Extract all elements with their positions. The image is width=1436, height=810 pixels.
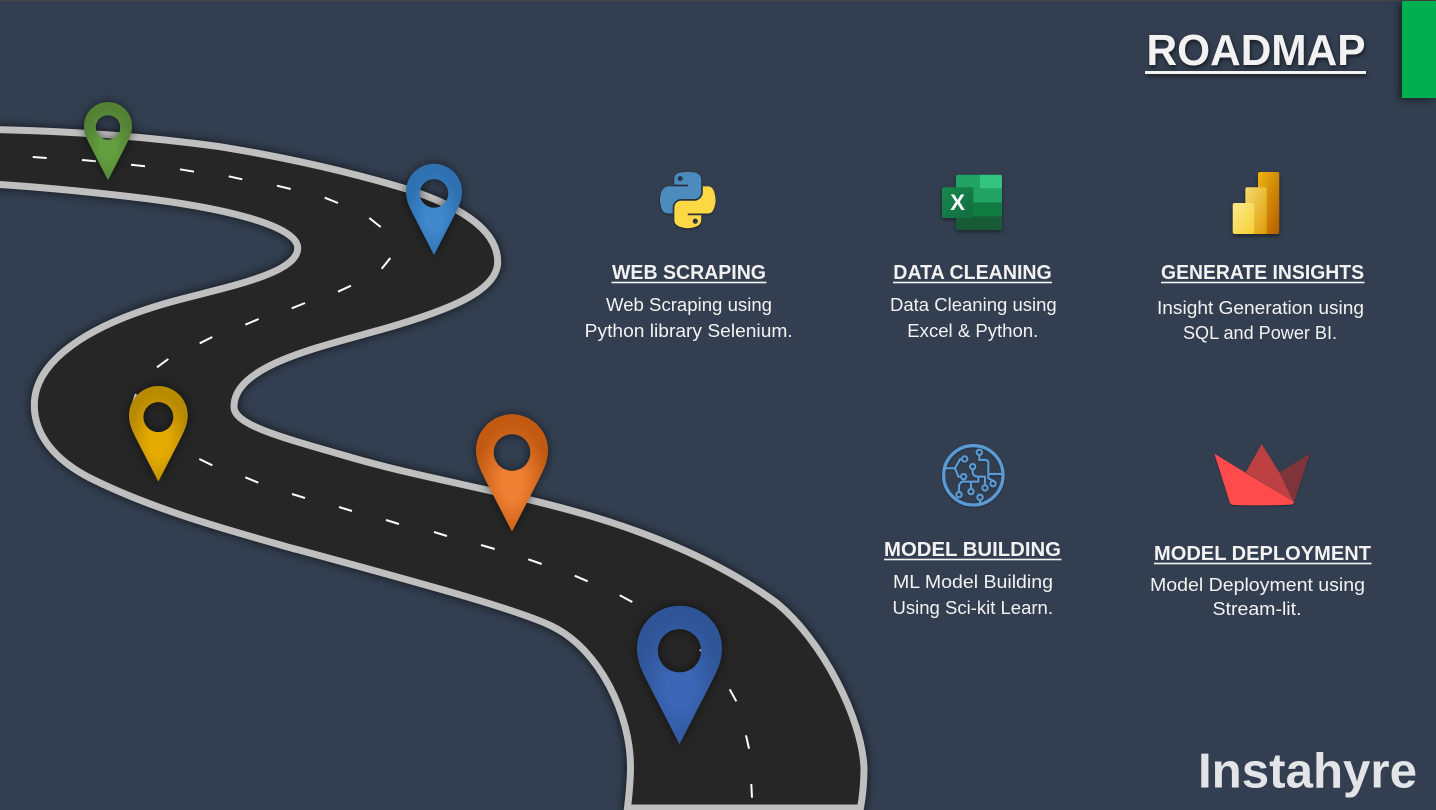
lane dashes xyxy=(33,157,752,798)
description: web scraping: Python library Selenium. xyxy=(585,321,793,341)
heading: model building: MODEL BUILDING xyxy=(884,538,1061,561)
pin: light blue xyxy=(406,164,462,255)
description: web scraping: Web Scraping using xyxy=(606,295,772,315)
description: web scraping xyxy=(585,295,793,341)
pin: yellow xyxy=(129,386,188,482)
heading: generate insights: GENERATE INSIGHTS xyxy=(1161,261,1364,284)
panel: web scraping xyxy=(585,172,793,341)
heading: web scraping: WEB SCRAPING xyxy=(612,261,766,284)
panel: data cleaning xyxy=(890,175,1057,341)
icon: circuit brain xyxy=(943,446,1003,505)
description: data cleaning xyxy=(890,295,1057,341)
icon: streamlit xyxy=(1214,444,1310,505)
panel: model building xyxy=(884,446,1062,618)
description: model deployment: Model Deployment using xyxy=(1150,575,1365,595)
description: model building: Using Sci-kit Learn. xyxy=(892,598,1053,618)
panel: generate insights xyxy=(1157,172,1364,343)
description: data cleaning: Data Cleaning using xyxy=(890,295,1057,315)
description: generate insights xyxy=(1157,298,1364,343)
road xyxy=(0,130,864,808)
panel: model deployment xyxy=(1150,444,1372,619)
description: generate insights: SQL and Power BI. xyxy=(1183,323,1337,343)
description: generate insights: Insight Generation using xyxy=(1157,298,1364,318)
icon: excel: X xyxy=(950,190,965,215)
heading: data cleaning: DATA CLEANING xyxy=(893,261,1052,284)
description: data cleaning: Excel & Python. xyxy=(907,321,1038,341)
description: model building xyxy=(892,572,1053,618)
green corner tab xyxy=(1402,1,1436,98)
pin: dark blue xyxy=(637,606,722,744)
watermark: instahyre: Instahyre xyxy=(1198,744,1417,798)
pin: green xyxy=(84,102,132,180)
icon: power bi xyxy=(1233,172,1279,234)
pin: orange xyxy=(476,414,548,532)
icon: excel xyxy=(942,175,1002,230)
description: model deployment: Stream-lit. xyxy=(1212,599,1302,619)
description: model deployment xyxy=(1150,575,1365,619)
description: model building: ML Model Building xyxy=(893,572,1053,592)
heading: model deployment: MODEL DEPLOYMENT xyxy=(1154,542,1371,565)
title: ROADMAP xyxy=(1146,26,1366,75)
icon: python xyxy=(660,172,716,228)
